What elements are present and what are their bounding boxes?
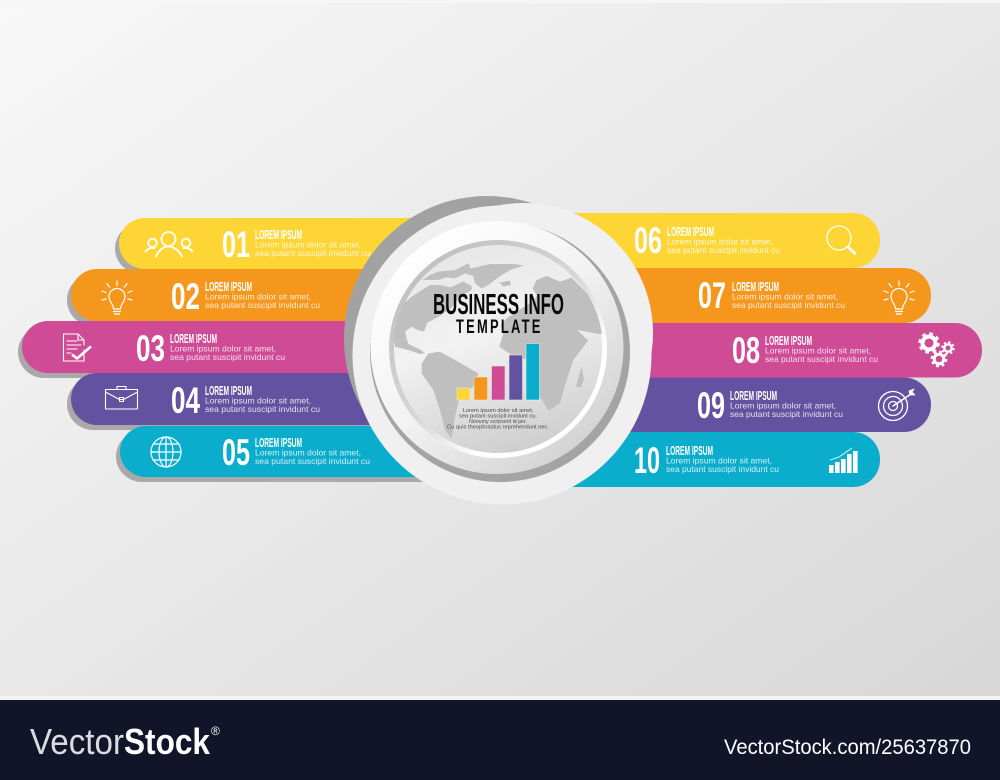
text block 02: sea putant suscipit invidunt cu xyxy=(205,300,320,310)
caption xyxy=(447,408,549,430)
text block 06: Lorem ipsum dolor sit amet, xyxy=(667,236,773,246)
icon: briefcase xyxy=(106,386,138,409)
panel: 07 orange right xyxy=(561,268,931,323)
footer logo: Stock xyxy=(124,721,211,762)
panel: 06 yellow right xyxy=(510,213,880,268)
footer id: VectorStock.com/25637870 xyxy=(724,736,971,759)
number 08: 08 xyxy=(732,330,760,371)
panel: 05 cyan left xyxy=(116,426,490,482)
text block 06: LOREM IPSUM xyxy=(667,225,714,239)
icon: growth chart xyxy=(829,448,858,473)
text block 03: sea putant suscipit invidunt cu xyxy=(170,352,285,362)
text block 01: Lorem ipsum dolor sit amet, xyxy=(255,240,361,250)
bar chart xyxy=(457,344,540,400)
panel: 03 pink left xyxy=(18,321,392,378)
footer logo: ® xyxy=(211,724,220,738)
icon: light bulb xyxy=(884,281,914,314)
central circle badge xyxy=(344,196,653,504)
text block 09: sea putant suscipit invidunt cu xyxy=(730,409,843,419)
panel: 02 orange left xyxy=(67,269,441,326)
text block 03: LOREM IPSUM xyxy=(170,332,217,346)
text block 01: sea putant suscipit invidunt cu xyxy=(255,248,370,258)
text block 09 xyxy=(730,389,843,419)
footer logo xyxy=(30,721,220,762)
caption: Nonumy scripserit id per. xyxy=(469,419,527,425)
icon: target xyxy=(878,389,915,420)
number 10: 10 xyxy=(634,440,660,481)
text block 02: LOREM IPSUM xyxy=(205,280,252,294)
text block 04: Lorem ipsum dolor sit amet, xyxy=(205,396,311,406)
panel: 09 purple right xyxy=(561,378,931,432)
text block 06: sea putant suscipit invidunt cu xyxy=(667,245,780,255)
panel: 08 pink right xyxy=(612,323,982,378)
footer logo: Vector xyxy=(30,721,124,762)
number 06: 06 xyxy=(634,220,662,261)
number 01: 01 xyxy=(222,224,250,265)
text block 04: LOREM IPSUM xyxy=(205,384,252,398)
text block 08: LOREM IPSUM xyxy=(765,334,812,348)
text block 08: sea putant suscipit invidunt cu xyxy=(765,354,878,364)
text block 02: Lorem ipsum dolor sit amet, xyxy=(205,292,311,302)
text block 07 xyxy=(732,280,845,310)
icon: people xyxy=(146,232,192,256)
icon: light bulb xyxy=(102,281,132,314)
world map xyxy=(387,263,607,438)
text block 01 xyxy=(255,228,370,258)
text block 01: LOREM IPSUM xyxy=(255,228,302,242)
text block 09: Lorem ipsum dolor sit amet, xyxy=(730,400,836,410)
number 05: 05 xyxy=(222,432,250,473)
text block 05: Lorem ipsum dolor sit amet, xyxy=(255,448,361,458)
inner disc xyxy=(392,242,604,456)
text block 10: Lorem ipsum dolor sit amet, xyxy=(666,456,772,466)
text block 03: Lorem ipsum dolor sit amet, xyxy=(170,344,276,354)
caption: Lorem ipsum dolor sit amet, xyxy=(462,408,534,414)
icon: globe xyxy=(151,437,181,467)
text block 05: LOREM IPSUM xyxy=(255,436,302,450)
subtitle: TEMPLATE xyxy=(456,317,543,338)
caption: Cu quis theophrastus reprehendunt nec. xyxy=(447,424,549,430)
text block 03 xyxy=(170,332,285,362)
footer bar xyxy=(0,700,1000,780)
text block 10: sea putant suscipit invidunt cu xyxy=(666,464,779,474)
icon: document with check xyxy=(64,334,91,361)
icon: magnifier xyxy=(827,226,855,254)
text block 07: LOREM IPSUM xyxy=(732,280,779,294)
number 07: 07 xyxy=(698,275,726,316)
text block 07: sea putant suscipit invidunt cu xyxy=(732,300,845,310)
text block 07: Lorem ipsum dolor sit amet, xyxy=(732,292,838,302)
text block 10: LOREM IPSUM xyxy=(666,444,713,458)
panel: 04 purple left xyxy=(67,373,441,430)
text block 10 xyxy=(666,444,779,474)
text block 02 xyxy=(205,280,320,310)
icon: gears xyxy=(920,334,954,366)
text block 08: Lorem ipsum dolor sit amet, xyxy=(765,346,871,356)
number 03: 03 xyxy=(136,328,165,369)
title: BUSINESS INFO xyxy=(433,289,564,321)
number 09: 09 xyxy=(697,385,725,426)
text block 04: sea putant suscipit invidunt cu xyxy=(205,404,320,414)
caption: sea putant suscipit invidunt cu. xyxy=(459,414,537,420)
text block 09: LOREM IPSUM xyxy=(730,389,777,403)
text block 05: sea putant suscipit invidunt cu xyxy=(255,456,370,466)
panel: 01 yellow left xyxy=(115,218,489,274)
panel: 10 cyan right xyxy=(510,432,880,487)
number 02: 02 xyxy=(171,276,200,317)
text block 08 xyxy=(765,334,878,364)
text block 06 xyxy=(667,225,780,255)
text block 04 xyxy=(205,384,320,414)
text block 05 xyxy=(255,436,370,466)
number 04: 04 xyxy=(171,380,200,421)
